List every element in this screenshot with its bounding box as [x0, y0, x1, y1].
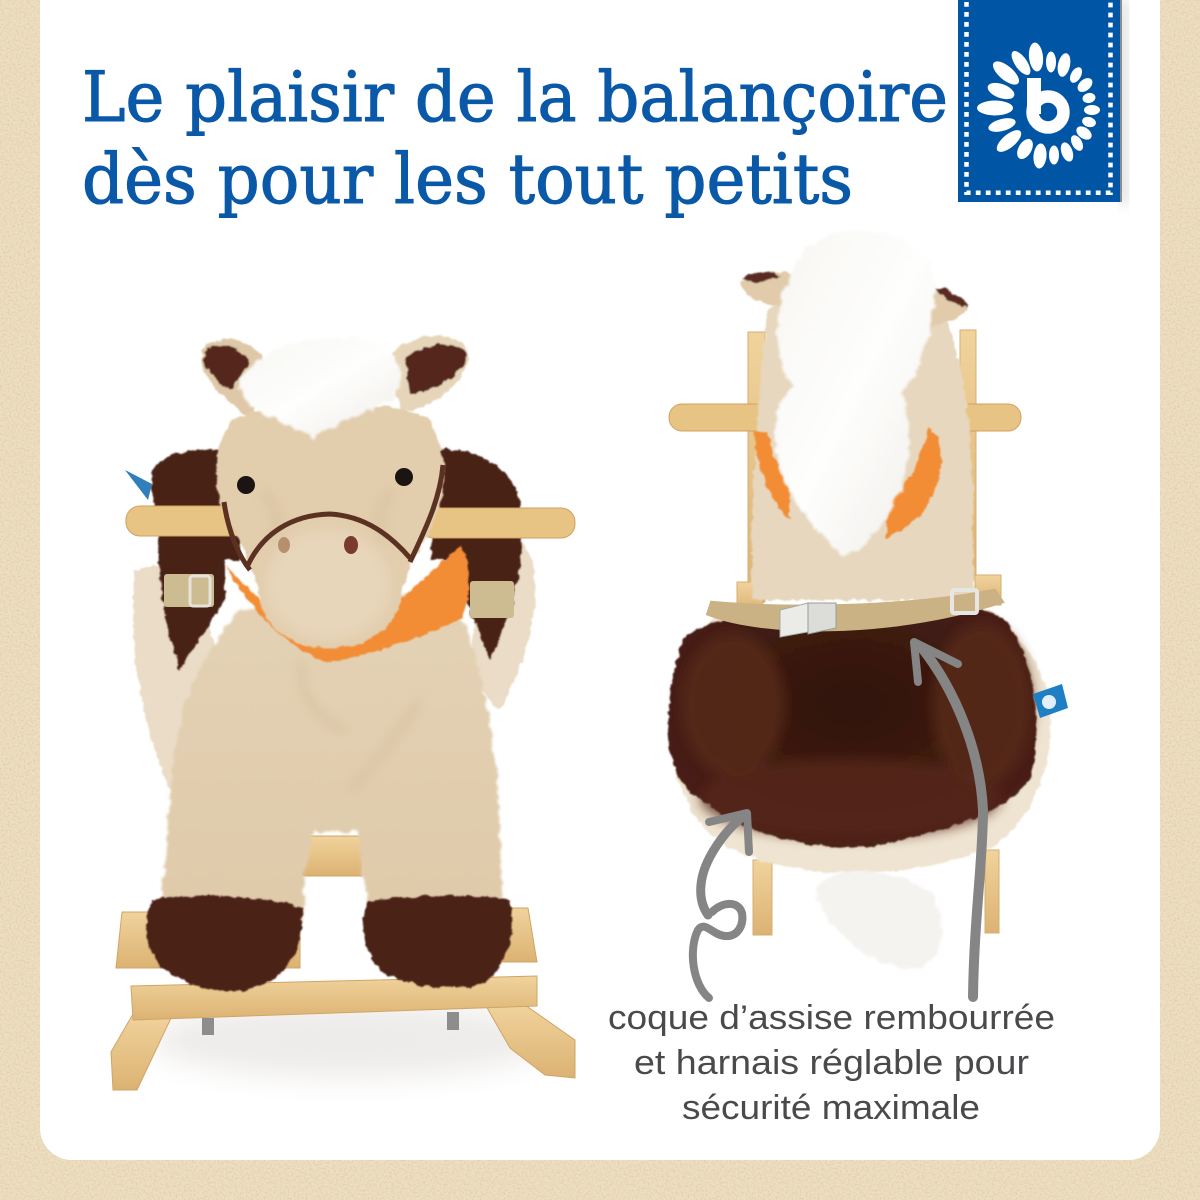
title: Le plaisir de la balançoire — [82, 58, 948, 138]
brown seat cushion — [668, 608, 1036, 847]
wooden rocker base — [111, 836, 575, 1090]
logo letter b — [1027, 78, 1064, 128]
horse body — [160, 590, 503, 925]
caption: sécurité maximale — [682, 1089, 980, 1127]
orange scarf — [226, 544, 469, 663]
ears — [740, 272, 968, 326]
face shading — [262, 490, 392, 540]
white forelock — [238, 338, 401, 438]
muzzle — [266, 530, 390, 640]
handlebar — [126, 506, 575, 538]
ribbon stitching — [966, 2, 1110, 193]
metal bolts — [202, 1012, 459, 1035]
arrow: seat shell — [693, 813, 749, 998]
white tail — [817, 872, 942, 968]
beige seat rim — [672, 610, 1051, 873]
title — [82, 58, 948, 220]
floor shadow — [150, 1002, 550, 1078]
orange scarf straps — [754, 428, 941, 538]
safety strap — [164, 574, 514, 618]
horse head — [216, 403, 444, 648]
brown seat lining — [152, 449, 522, 670]
white mane — [775, 230, 935, 554]
logo flower petals — [977, 42, 1100, 169]
brand ribbon logo — [958, 0, 1127, 204]
nostrils — [278, 536, 358, 554]
bridle — [224, 465, 443, 570]
beige seat shell — [133, 540, 535, 800]
handlebar — [669, 404, 1021, 431]
hooves — [147, 896, 512, 991]
title: dès pour les tout petits — [82, 140, 853, 220]
arrow: harness — [914, 642, 983, 997]
seat side bolsters — [681, 623, 1032, 838]
body shading — [300, 660, 420, 790]
caption — [608, 999, 1055, 1127]
wooden uprights — [737, 330, 1001, 935]
product photo: seat view rocking horse — [668, 230, 1068, 968]
horse neck and back — [751, 296, 974, 600]
blue label — [125, 470, 152, 500]
caption: et harnais réglable pour — [634, 1044, 1029, 1082]
harness buckle — [780, 590, 977, 637]
harness strap — [712, 594, 997, 626]
ears — [202, 336, 468, 420]
blue brand tag — [1033, 684, 1068, 718]
product photo: front view rocking horse — [111, 336, 575, 1090]
caption: coque d’assise rembourrée — [608, 999, 1055, 1037]
eyes — [237, 468, 413, 494]
